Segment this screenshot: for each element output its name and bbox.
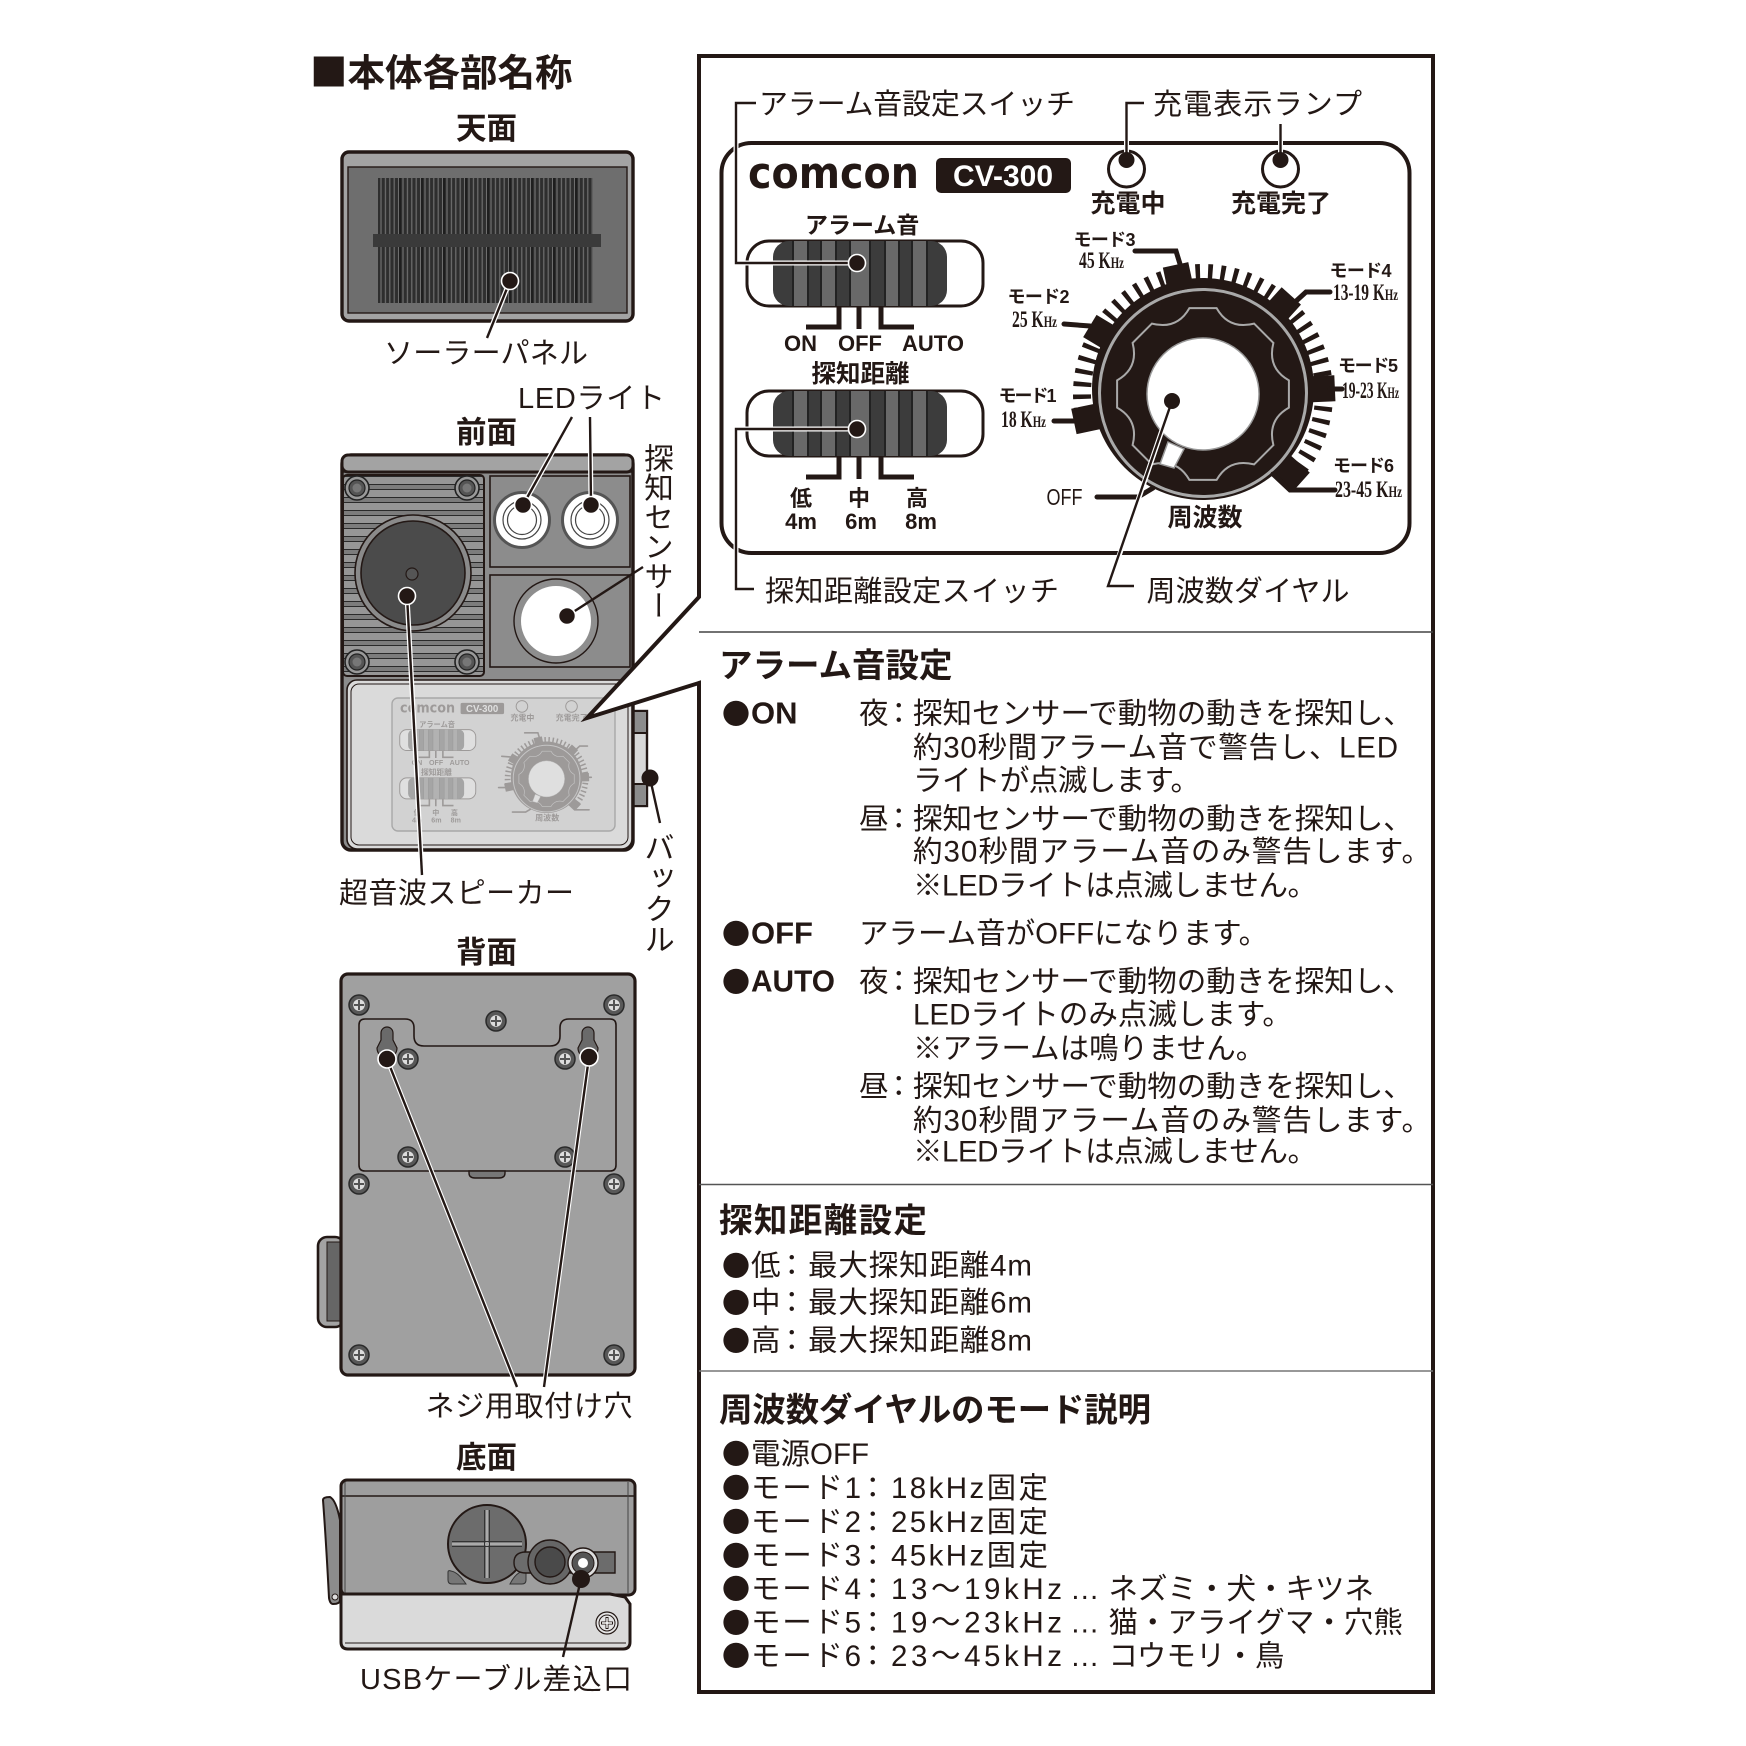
mode list: ● <box>722 1433 750 1473</box>
labels: distance values: 低 <box>790 486 812 511</box>
label: LED lights: LEDライト <box>518 383 665 415</box>
mode list: コウモリ・鳥 <box>1108 1640 1284 1673</box>
label: solar panel: ソーラーパネル <box>384 338 588 370</box>
mode list: 13～19kHz <box>891 1573 1062 1606</box>
lid with mini control panel: アラーム音 <box>419 720 455 729</box>
heading: distance switch: 探知距離 <box>812 360 910 388</box>
lid with mini control panel: 探知距離 <box>421 767 452 777</box>
mode list: ： <box>858 1506 888 1539</box>
mode list: ： <box>858 1606 888 1640</box>
model badge <box>936 158 1071 193</box>
dial mode labels: 45 KHz <box>1079 248 1124 273</box>
connector bar and USB port <box>514 1540 615 1584</box>
AUTO: 探知センサーで動物の動きを探知し、 <box>913 1070 1413 1104</box>
ON: ● <box>722 693 750 733</box>
charge lamps: 充電完了 <box>1231 190 1331 218</box>
title: ■本体各部名称 <box>310 42 572 97</box>
panel outline <box>722 143 1410 553</box>
mode list: ● <box>722 1602 750 1642</box>
labels: distance values: 6m <box>845 509 877 534</box>
heading: front view: 前面 <box>456 416 517 450</box>
AUTO: 夜 <box>859 966 889 998</box>
label: buckle (vertical): バックル <box>640 832 674 954</box>
mode list: 23～45kHz <box>891 1640 1062 1673</box>
leader <box>563 1570 590 1657</box>
mode list: モード6 <box>751 1640 861 1673</box>
keyholes <box>377 1027 598 1058</box>
AUTO: LEDライトのみ点滅します。 <box>913 998 1292 1032</box>
heading: 周波数ダイヤルのモード説明 <box>719 1392 1151 1430</box>
LED lights <box>490 476 630 567</box>
distance switch <box>747 391 983 479</box>
lid with mini control panel: 中 <box>432 808 439 817</box>
buckle <box>633 711 647 806</box>
lid with mini control panel <box>347 680 632 849</box>
mode list: ： <box>858 1472 888 1505</box>
ON: ライトが点滅します。 <box>913 764 1200 798</box>
mode list: ： <box>858 1573 888 1606</box>
distance list: 低 <box>751 1250 781 1282</box>
lid with mini control panel: 充電完了 <box>556 712 588 722</box>
distance list: 最大探知距離4m <box>808 1250 1032 1282</box>
left buckle <box>318 1237 344 1327</box>
distance list: ● <box>722 1282 750 1322</box>
mode list: ● <box>722 1568 750 1608</box>
AUTO: AUTO <box>751 964 835 998</box>
distance list: 最大探知距離8m <box>808 1324 1032 1358</box>
lid with mini control panel: 高 <box>451 808 458 817</box>
section: detection distance settings <box>719 1203 1032 1360</box>
diagram: top view solar panel <box>342 152 633 338</box>
ON: 約30秒間アラーム音のみ警告します。 <box>913 836 1431 868</box>
lid with mini control panel: 6m <box>431 817 442 825</box>
distance list: ● <box>722 1320 750 1360</box>
panel: control panel explanation frame with callout wedge <box>587 56 1433 1692</box>
AUTO: 約30秒間アラーム音のみ警告します。 <box>913 1104 1431 1138</box>
lid edge <box>341 1594 630 1649</box>
mode list: ： <box>858 1640 888 1673</box>
distance list: ： <box>777 1286 807 1320</box>
dial mode labels: 25 KHz <box>1012 307 1057 332</box>
dial caption: 周波数 <box>1168 504 1243 532</box>
diagram: bottom view <box>323 1480 635 1657</box>
distance list: ● <box>722 1245 750 1285</box>
heading: アラーム音設定 <box>719 648 952 685</box>
AUTO: ※LEDライトは点滅しません。 <box>913 1136 1317 1168</box>
dial mode labels: モード6 <box>1333 456 1394 476</box>
mode list: ● <box>722 1467 750 1507</box>
labels: distance values: 中 <box>848 486 870 511</box>
labels: distance values: 4m <box>785 509 817 534</box>
lid with mini control panel: 8m <box>451 817 461 825</box>
dial mode labels: モード1 <box>998 386 1056 406</box>
heading: bottom view: 底面 <box>456 1441 517 1475</box>
label: screw mounting holes: ネジ用取付け穴 <box>426 1390 632 1423</box>
ON: 約30秒間アラーム音で警告し、LED <box>913 732 1398 764</box>
charge lamps <box>1090 151 1331 218</box>
labels: distance values: 高 <box>906 486 928 511</box>
mode list: 45kHz固定 <box>891 1540 1048 1572</box>
label: charge lamp: 充電表示ランプ <box>1153 88 1362 121</box>
mode list: 電源OFF <box>751 1438 869 1471</box>
AUTO: ： <box>884 966 914 998</box>
dial mode labels: モード4 <box>1330 261 1392 281</box>
labels: on off auto <box>784 331 964 356</box>
mode list: モード5 <box>751 1606 861 1640</box>
heading: back view: 背面 <box>456 936 517 970</box>
lid with mini control panel: AUTO <box>450 759 470 767</box>
mode list <box>722 1433 1403 1675</box>
divider 1 <box>699 631 1433 633</box>
ON: 探知センサーで動物の動きを探知し、 <box>913 698 1413 730</box>
OFF: アラーム音がOFFになります。 <box>859 918 1268 950</box>
mode list: 25kHz固定 <box>891 1506 1048 1539</box>
lid with mini control panel: CV-300 <box>466 704 498 715</box>
panel: control panel diagram <box>722 103 1410 589</box>
leaders <box>378 1048 598 1387</box>
speaker grille <box>343 475 484 676</box>
heading: alarm switch: アラーム音 <box>805 212 919 238</box>
mode list: 19～23kHz <box>891 1606 1062 1640</box>
labels: on off auto: AUTO <box>902 331 964 356</box>
label: alarm switch: アラーム音設定スイッチ <box>759 88 1075 121</box>
lid with mini control panel: OFF <box>429 759 444 767</box>
ON <box>722 693 1431 902</box>
AUTO: ： <box>884 1070 914 1104</box>
mode list: … <box>1070 1606 1100 1640</box>
mode list: モード3 <box>751 1540 861 1572</box>
mode list: ● <box>722 1501 750 1541</box>
mode list: … <box>1070 1573 1100 1606</box>
logo: comcon <box>748 148 919 199</box>
ON: ON <box>751 696 798 730</box>
label: detection sensor (vertical): 探知センサー <box>640 443 674 620</box>
lid with mini control panel: ON <box>412 759 422 767</box>
mode list: 18kHz固定 <box>891 1472 1048 1505</box>
distance list: ： <box>777 1324 807 1358</box>
round cover <box>448 1505 526 1584</box>
mode list: ● <box>722 1635 750 1675</box>
lid with mini control panel: 4m <box>412 817 422 825</box>
leaders and dots <box>398 417 660 875</box>
lid with mini control panel: 充電中 <box>510 712 534 722</box>
mode list: 猫・アライグマ・穴熊 <box>1108 1606 1403 1640</box>
diagram: back view <box>318 974 635 1387</box>
labels: on off auto: OFF <box>838 331 882 356</box>
label: ultrasonic speaker: 超音波スピーカー <box>339 877 574 910</box>
dial mode labels: 13-19 KHz <box>1333 280 1398 305</box>
distance list: ： <box>777 1250 807 1282</box>
AUTO: ※アラームは鳴りません。 <box>913 1032 1265 1066</box>
screws <box>349 995 624 1365</box>
ON: 昼 <box>859 803 889 836</box>
mode list: ネズミ・犬・キツネ <box>1108 1573 1374 1606</box>
frequency dial <box>1054 251 1342 515</box>
alarm switch <box>747 241 983 329</box>
labels: distance values <box>785 486 937 534</box>
OFF: ● <box>722 913 750 953</box>
section: alarm sound settings <box>719 648 1431 1168</box>
dial mode labels: 23-45 KHz <box>1335 477 1402 502</box>
labels: on off auto: ON <box>784 331 817 356</box>
divider 2 <box>699 1184 1433 1186</box>
dial mode labels <box>998 230 1402 510</box>
distance list <box>722 1245 1032 1360</box>
ON: ： <box>884 698 914 730</box>
divider 3 <box>699 1370 1433 1372</box>
AUTO <box>722 961 1431 1168</box>
dial mode labels: モード5 <box>1338 356 1398 376</box>
dial mode labels: 19-23 KHz <box>1342 378 1399 403</box>
label: distance switch: 探知距離設定スイッチ <box>765 575 1059 608</box>
distance list: 最大探知距離6m <box>808 1286 1032 1320</box>
dial mode labels: モード3 <box>1074 230 1136 250</box>
ON: ： <box>884 803 914 836</box>
mode list: モード4 <box>751 1573 861 1606</box>
mode list: ● <box>722 1535 750 1575</box>
mode list: モード1 <box>751 1472 861 1505</box>
ON: ※LEDライトは点滅しません。 <box>913 870 1317 902</box>
label: frequency dial: 周波数ダイヤル <box>1146 575 1350 608</box>
mode list: ： <box>858 1540 888 1572</box>
AUTO: 昼 <box>859 1070 889 1104</box>
model badge: CV-300 <box>953 160 1053 193</box>
diagram: front view <box>342 417 660 875</box>
OFF <box>722 913 1268 953</box>
dial mode labels: 18 KHz <box>1001 407 1046 432</box>
AUTO: ● <box>722 961 750 1001</box>
heading: top view: 天面 <box>456 112 517 146</box>
AUTO: 探知センサーで動物の動きを探知し、 <box>913 966 1413 998</box>
distance list: 中 <box>751 1286 781 1320</box>
sensor <box>490 575 630 667</box>
body <box>342 455 633 850</box>
distance list: 高 <box>751 1324 781 1358</box>
lid with mini control panel: 低 <box>414 808 421 817</box>
dial mode labels: OFF <box>1046 484 1082 510</box>
ON: 夜 <box>859 698 889 730</box>
mode list: モード2 <box>751 1506 861 1539</box>
leaders and pointers <box>736 103 1288 589</box>
screw <box>596 1612 618 1634</box>
heading: 探知距離設定 <box>719 1203 927 1240</box>
lid with mini control panel: comcon <box>400 701 455 717</box>
lid with mini control panel: 周波数 <box>535 813 559 823</box>
dial mode labels: モード2 <box>1008 287 1070 307</box>
label: USB port: USBケーブル差込口 <box>360 1663 632 1696</box>
mode list: … <box>1070 1640 1100 1673</box>
charge lamps: 充電中 <box>1090 190 1166 218</box>
ON: 探知センサーで動物の動きを探知し、 <box>913 803 1413 836</box>
OFF: OFF <box>751 916 813 950</box>
section: frequency dial modes <box>719 1392 1403 1675</box>
labels: distance values: 8m <box>905 509 937 534</box>
